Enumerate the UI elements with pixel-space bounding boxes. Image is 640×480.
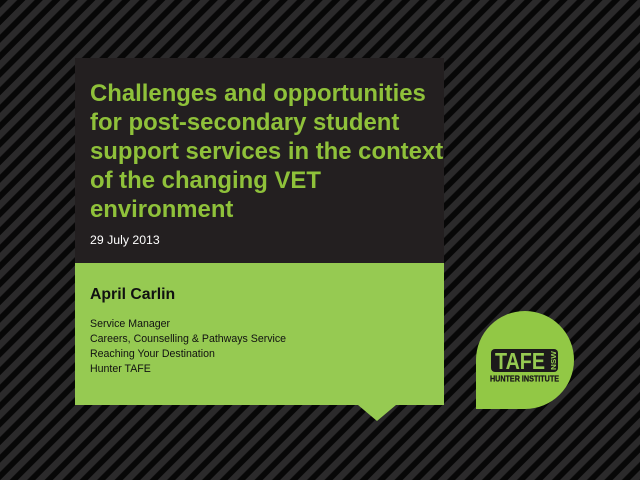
logo: TAFE NSW Hunter Institute: TAFE — [495, 348, 545, 374]
icon: speech pointer — [358, 405, 396, 421]
text: date: 29 July 2013 — [90, 233, 160, 247]
logo: TAFE NSW Hunter Institute — [476, 311, 574, 409]
heading: presentation title: support services in the context — [90, 138, 443, 165]
heading: presentation title: for post-secondary student — [90, 109, 399, 136]
text: presenter details — [90, 318, 286, 375]
text: presenter details: Careers, Counselling & Pathways Service — [90, 333, 286, 345]
heading: presenter name: April Carlin — [90, 286, 175, 303]
text: presenter details: Hunter TAFE — [90, 363, 151, 375]
heading: presentation title: environment — [90, 196, 233, 223]
heading: presentation title — [90, 80, 443, 223]
panel: presenter — [75, 263, 444, 405]
logo: TAFE NSW Hunter Institute: HUNTER INSTITUTE — [490, 374, 559, 384]
text: presenter details: Reaching Your Destination — [90, 348, 215, 360]
heading: presentation title: of the changing VET — [90, 167, 321, 194]
panel: title — [75, 58, 444, 263]
heading: presentation title: Challenges and opportunities — [90, 80, 426, 107]
logo: TAFE NSW Hunter Institute: NSW — [551, 351, 558, 370]
text: presenter details: Service Manager — [90, 318, 170, 330]
